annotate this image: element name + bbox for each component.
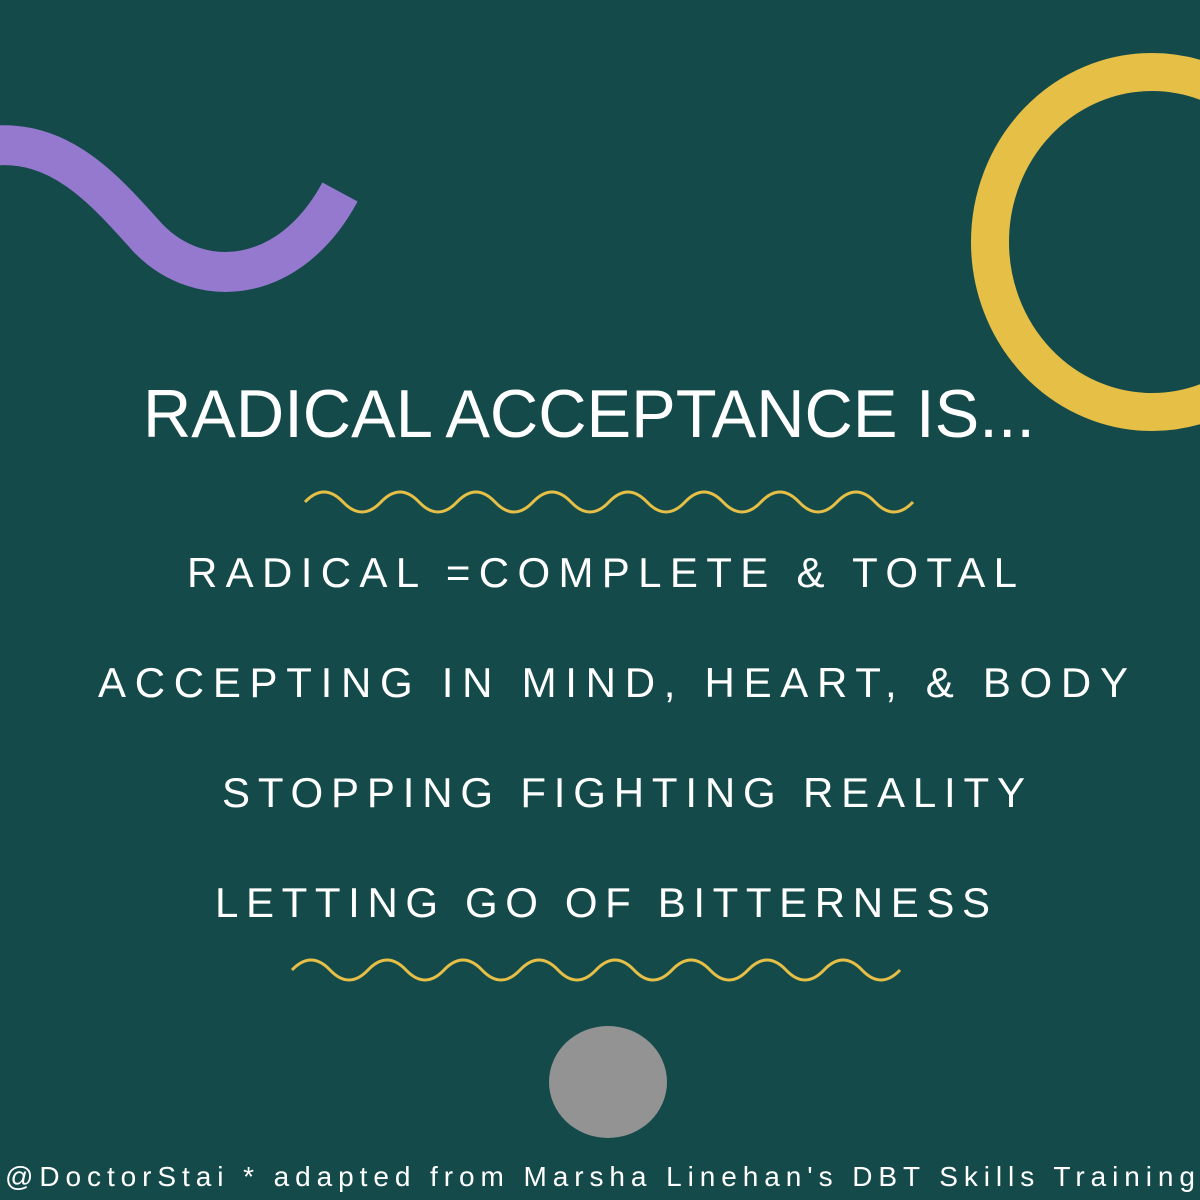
title: RADICAL ACCEPTANCE IS... [143, 376, 1035, 452]
text: line 4: LETTING GO OF BITTERNESS [215, 879, 990, 926]
text: line 1: RADICAL =COMPLETE & TOTAL [187, 549, 1017, 596]
divider: top wavy line [305, 492, 913, 512]
decoration: yellow circle [990, 72, 1200, 412]
decoration: purple wave [0, 145, 340, 272]
decoration: gray blob [549, 1026, 667, 1138]
text: line 2: ACCEPTING IN MIND, HEART, & BODY [98, 659, 1128, 706]
footer credit: @DoctorStai * adapted from Marsha Linehan's DBT Skills Training [5, 1161, 1195, 1192]
text: line 3: STOPPING FIGHTING REALITY [222, 769, 1025, 816]
divider: bottom wavy line [292, 960, 900, 980]
